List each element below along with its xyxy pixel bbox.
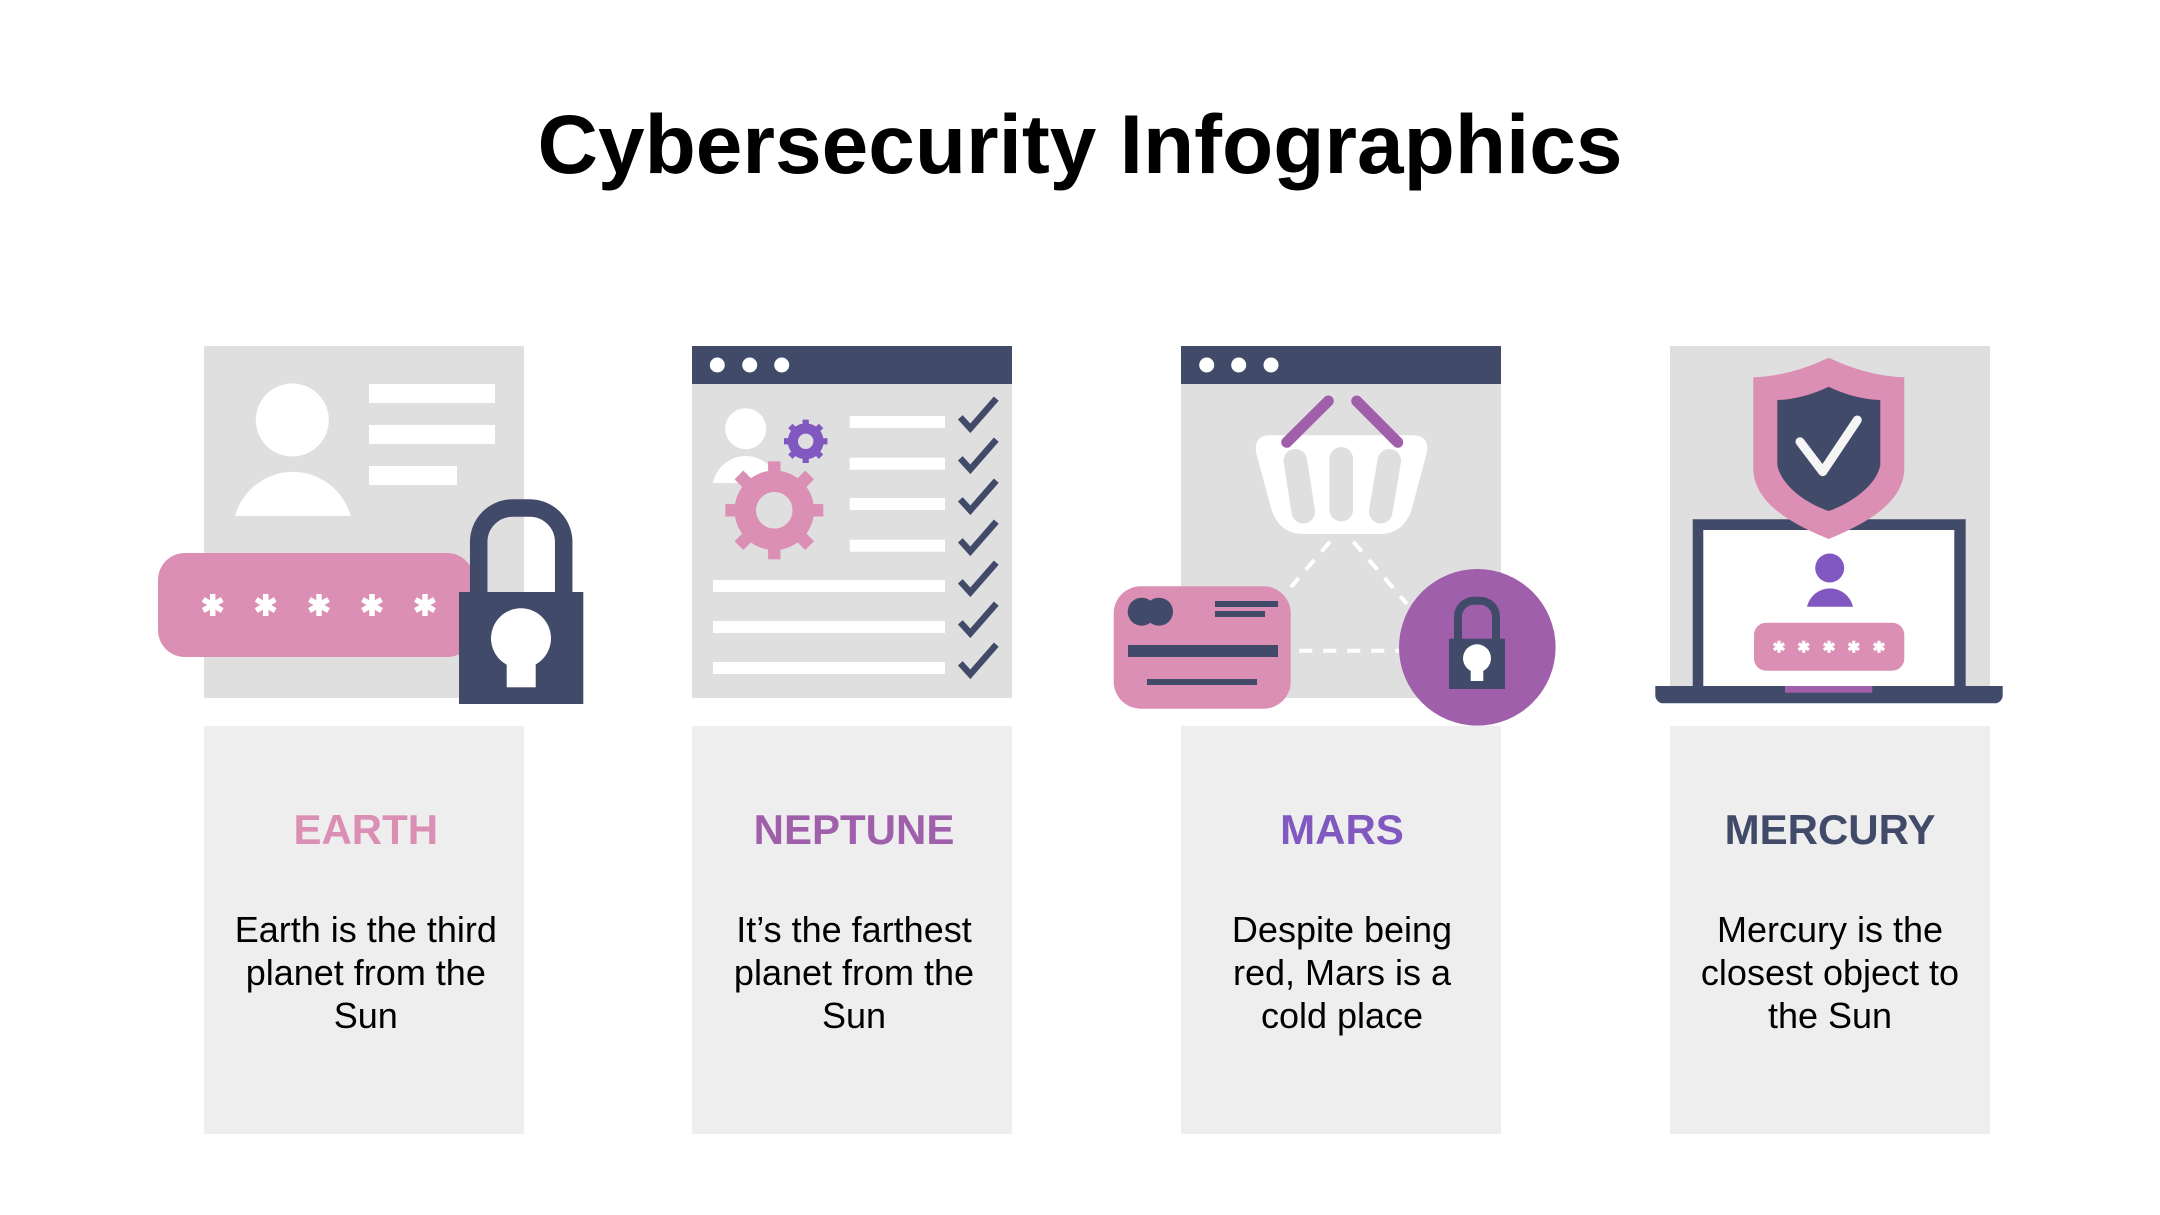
title: Cybersecurity Infographics [537,97,1623,191]
text block: mercury description: closest object to [1701,952,1959,993]
icon: user [235,384,351,516]
checklist lines [713,416,945,674]
icon: large gear [725,461,823,559]
text block: neptune description: Sun [822,995,886,1036]
panel: neptune illustration [692,346,1012,698]
text block: mars description: red, Mars is a [1233,952,1452,993]
icon: small gear [784,420,827,463]
icon: laptop [1655,519,2003,703]
icons: check marks [960,399,996,674]
browser bar [692,346,1012,384]
panel: mercury illustration [1655,346,2003,703]
panel: neptune text card [692,726,1012,1134]
text block: earth description: Sun [334,995,398,1036]
heading: earth: EARTH [293,806,438,853]
icon: shield with check [1753,358,1904,539]
panel: earth text card [204,726,524,1134]
panel: earth illustration [158,346,583,704]
icon: padlock [459,508,583,704]
password field [1754,623,1904,671]
panel: mercury text card [1670,726,1990,1134]
text block: earth description: planet from the [246,952,486,993]
heading: neptune: NEPTUNE [754,806,954,853]
text block: mars description: Despite being [1232,909,1452,950]
text block: neptune description: planet from the [734,952,974,993]
icon: user [713,408,778,483]
panel: mars illustration [1114,346,1556,726]
heading: mercury: MERCURY [1725,806,1935,853]
panel: mars text card [1181,726,1501,1134]
icon: lock in circle [1399,569,1556,726]
icon: user [1807,554,1853,607]
text block: earth description: Earth is the third [235,909,497,950]
text block: mars description: cold place [1261,995,1423,1036]
icon: credit card [1114,586,1291,709]
browser bar [1181,346,1501,384]
dashed connectors [1291,542,1407,651]
password field [158,553,474,657]
profile text lines [369,384,495,485]
text block: mercury description: the Sun [1768,995,1892,1036]
text block: neptune description: It’s the farthest [736,909,972,950]
heading: mars: MARS [1280,806,1404,853]
text block: mercury description: Mercury is the [1717,909,1943,950]
icon: shopping basket [1256,401,1427,534]
